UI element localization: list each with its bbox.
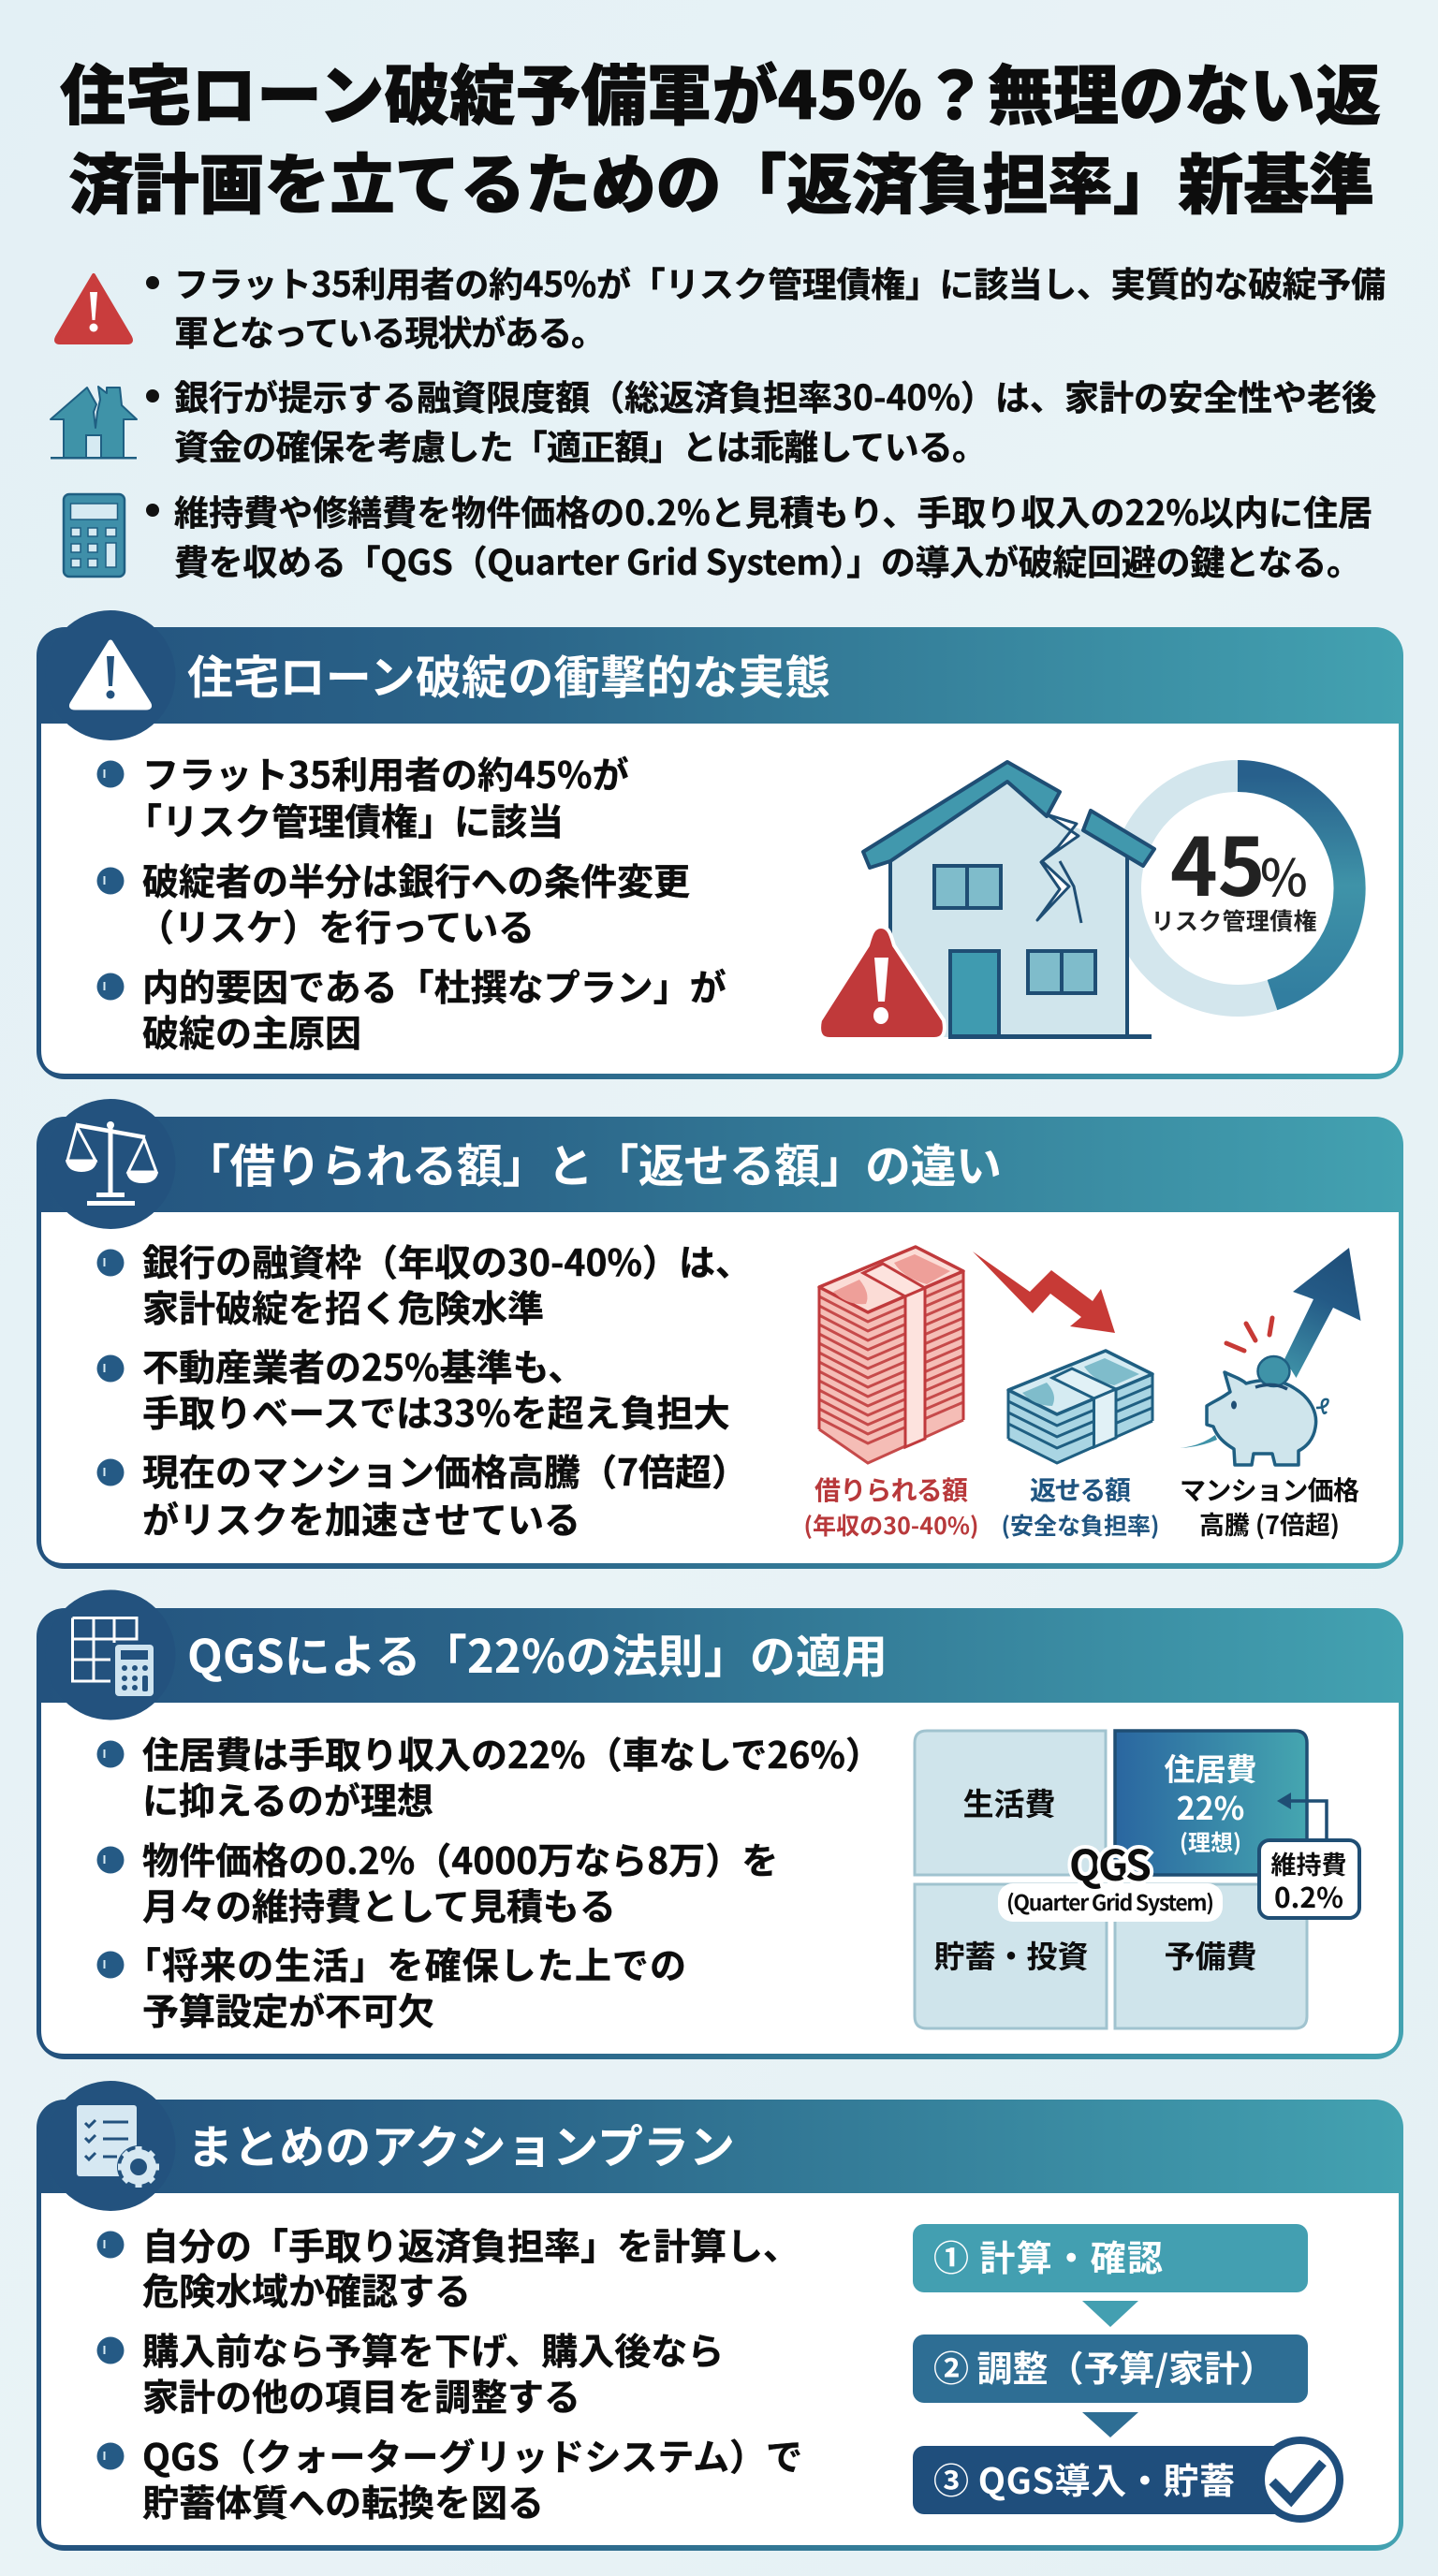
bullet list: 現在のマンション価格高騰（7倍超） (142, 1444, 748, 1497)
step 1: ① 計算・確認 (933, 2230, 1163, 2281)
panel frame (37, 1608, 1403, 2059)
caption: borrowable: (年収の30-40%) (803, 1508, 979, 1542)
heading: QGSによる「22%の法則」の適用 (187, 1620, 888, 1687)
panel frame (37, 2100, 1403, 2551)
cell: living expenses (915, 1731, 1106, 1875)
summary point 3: 維持費や修繕費を物件価格の0.2%と見積もり、手取り収入の22%以内に住居 (174, 485, 1372, 535)
step 2 (913, 2334, 1308, 2403)
donut chart 45%: 45 (1170, 802, 1265, 919)
step 3: ③ QGS導入・貯蓄 (933, 2452, 1235, 2504)
step 1 (913, 2224, 1308, 2292)
bullet list: 破綻の主原因 (142, 1005, 361, 1058)
summary point 1 (146, 256, 1386, 356)
summary point 1: フラット35利用者の約45%が「リスク管理債権」に該当し、実質的な破綻予備 (174, 256, 1386, 307)
icon: checklist and gear (45, 2081, 176, 2211)
icon: white warning in navy circle (45, 610, 176, 740)
step 3 (913, 2446, 1308, 2514)
arrow: step 2 to 3 (1082, 2412, 1138, 2437)
summary point 2: 資金の確保を考慮した「適正額」とは乖離している。 (174, 419, 987, 470)
bullet list: 「将来の生活」を確保した上での (125, 1938, 686, 1990)
bullet list (97, 2218, 802, 2527)
caption: borrowable (803, 1471, 979, 1542)
heading: 住宅ローン破綻の衝撃的な実態 (187, 641, 830, 708)
donut chart 45%: % (1260, 837, 1308, 911)
summary point 1: 軍となっている現状がある。 (174, 305, 606, 356)
callout: maintenance 0.2% (1259, 1840, 1359, 1918)
cell: housing 22%: 住居費 (1165, 1745, 1256, 1790)
arrow: rising price (1284, 1248, 1361, 1378)
icon: red warning triangle (56, 275, 131, 343)
illustration: red warning triangle (819, 927, 945, 1039)
arrow: maintenance to housing (1277, 1793, 1327, 1840)
bullet list (97, 747, 726, 1058)
bullet list: 貯蓄体質への転換を図る (142, 2475, 544, 2527)
arrow: red zigzag down (973, 1251, 1115, 1333)
heading: 「借りられる額」と「返せる額」の違い (184, 1130, 1002, 1196)
caption: condo prices: 高騰 (7倍超) (1199, 1505, 1340, 1542)
caption: condo prices (1180, 1471, 1359, 1542)
icon: cracked house (51, 387, 137, 459)
center label QGS: QGS (1069, 1832, 1152, 1893)
caption: condo prices: マンション価格 (1180, 1471, 1359, 1508)
cell: living expenses: 生活費 (962, 1779, 1056, 1824)
bullet list: に抑えるのが理想 (142, 1773, 433, 1825)
arrow: step 1 to 2 (1082, 2301, 1138, 2327)
cell: housing 22%: (理想) (1180, 1824, 1241, 1857)
bullet list: 破綻者の半分は銀行への条件変更 (142, 854, 690, 906)
summary bullets (51, 256, 1386, 585)
icon: check circle (1261, 2440, 1340, 2519)
step 2: ② 調整（予算/家計） (933, 2340, 1275, 2392)
panel: shocking reality (37, 610, 1403, 1079)
callout: maintenance 0.2%: 維持費 (1271, 1845, 1346, 1881)
icon: calculator (64, 494, 125, 577)
summary point 2 (146, 370, 1376, 470)
panel frame (37, 627, 1403, 1079)
illustration: red money stack (819, 1247, 963, 1463)
title (60, 44, 1381, 227)
icon: grid and calculator (45, 1589, 176, 1720)
caption: borrowable: 借りられる額 (814, 1471, 968, 1508)
center label QGS: (Quarter Grid System) (1006, 1885, 1214, 1917)
bullet list: 内的要因である「杜撰なプラン」が (142, 959, 726, 1012)
bullet list: 物件価格の0.2%（4000万なら8万）を (142, 1833, 778, 1885)
icon: scales (45, 1099, 176, 1229)
bullet list: 自分の「手取り返済負担率」を計算し、 (142, 2218, 800, 2271)
bullet list: 購入前なら予算を下げ、購入後なら (142, 2323, 724, 2376)
bullet list: 家計破綻を招く危険水準 (142, 1281, 544, 1333)
callout: maintenance 0.2%: 0.2% (1274, 1875, 1343, 1916)
cell: housing 22% (1115, 1731, 1307, 1875)
title: 住宅ローン破綻予備軍が45%？無理のない返 (60, 44, 1381, 139)
illustration: cracked house (863, 762, 1154, 1039)
chart: quarter grid (915, 1731, 1359, 2028)
bullet list: フラット35利用者の約45%が (142, 747, 629, 799)
bullet list: 予算設定が不可欠 (142, 1983, 434, 2036)
bullet list (97, 1235, 752, 1544)
panel: QGS 22% rule (37, 1589, 1403, 2059)
heading: まとめのアクションプラン (187, 2111, 735, 2177)
bullet list: QGS（クォーターグリッドシステム）で (142, 2429, 802, 2481)
panel: action plan (37, 2081, 1403, 2551)
caption: repayable: 返せる額 (1030, 1471, 1131, 1508)
caption: repayable (1002, 1471, 1159, 1542)
flow diagram (913, 2224, 1340, 2519)
bullet list: 家計の他の項目を調整する (142, 2369, 580, 2422)
title: 済計画を立てるための「返済負担率」新基準 (68, 133, 1374, 227)
summary point 3: 費を収める「QGS（Quarter Grid System）」の導入が破綻回避の鍵となる。 (174, 534, 1361, 585)
caption: repayable: (安全な負担率) (1002, 1508, 1159, 1542)
center label QGS (998, 1832, 1223, 1922)
donut chart 45%: リスク管理債権 (1152, 903, 1316, 937)
bullet list: （リスケ）を行っている (138, 900, 535, 952)
bullet list (97, 1727, 882, 2036)
bullet list: 手取りベースでは33%を超え負担大 (142, 1385, 730, 1438)
bullet list: 危険水域か確認する (142, 2263, 471, 2316)
donut chart 45% (1125, 776, 1350, 1001)
bullet list: 銀行の融資枠（年収の30-40%）は、 (142, 1235, 752, 1287)
bullet list: 不動産業者の25%基準も、 (142, 1339, 584, 1392)
cell: reserve (1115, 1884, 1307, 2028)
bullet list: 月々の維持費として見積もる (142, 1879, 616, 1931)
cell: reserve: 予備費 (1165, 1932, 1256, 1977)
bullet list: がリスクを加速させている (142, 1492, 580, 1544)
panel frame (37, 1117, 1403, 1569)
panel: borrowable vs repayable (37, 1099, 1403, 1569)
cell: savings and investment: 貯蓄・投資 (934, 1932, 1088, 1977)
bullet list: 「リスク管理債権」に該当 (125, 794, 564, 846)
summary point 2: 銀行が提示する融資限度額（総返済負担率30-40%）は、家計の安全性や老後 (174, 370, 1376, 420)
summary point 3 (146, 485, 1372, 585)
illustration: blue money stack (1008, 1351, 1152, 1463)
cell: savings and investment (915, 1884, 1107, 2028)
cell: housing 22%: 22% (1177, 1783, 1244, 1829)
bullet list: 住居費は手取り収入の22%（車なしで26%） (142, 1727, 882, 1779)
illustration: piggy bank (1180, 1318, 1328, 1465)
